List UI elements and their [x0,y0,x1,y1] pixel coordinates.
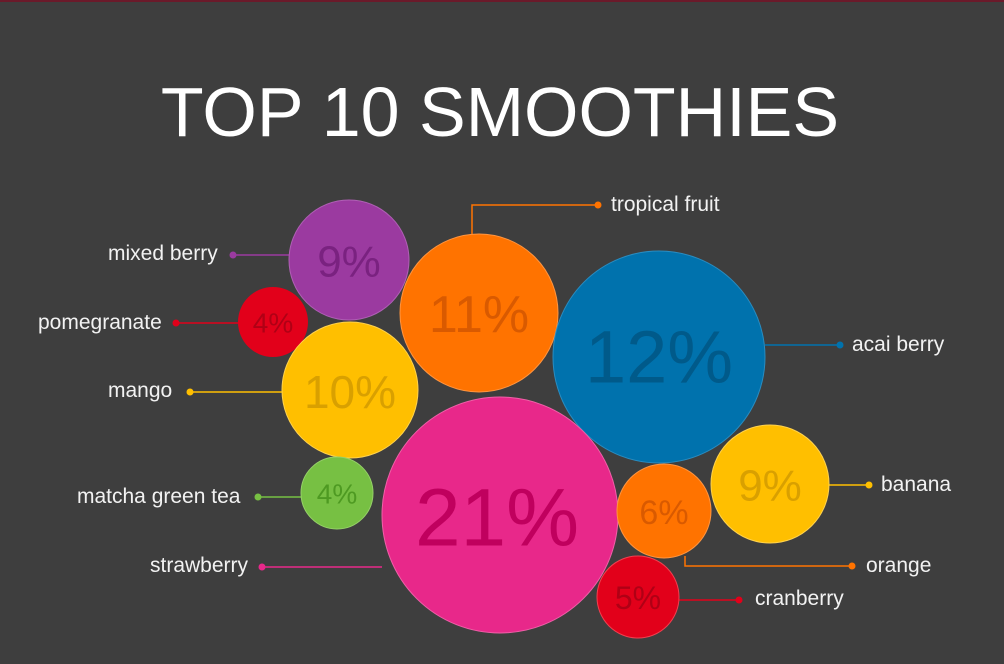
bubble: acai berry: 12% [585,316,733,398]
bubble: strawberry [150,397,618,633]
bubble: mixed berry: 9% [317,238,381,286]
bubble: cranberry [597,556,844,638]
bubble: pomegranate: 4% [253,308,293,338]
bubble: acai berry [553,251,945,463]
bubble: orange: orange [866,554,931,577]
bubble: mango: mango [108,379,172,402]
bubble: strawberry: 21% [415,472,579,564]
bubble: strawberry: strawberry [150,554,249,577]
bubble: tropical fruit [400,193,720,392]
bubble: mango [108,322,418,458]
bubble: matcha green tea: matcha green tea [77,485,241,508]
bubble: orange: 6% [639,494,689,532]
bubble: cranberry: 5% [615,580,661,616]
bubble: banana: 9% [738,462,802,510]
bubble: mixed berry [108,200,409,320]
bubble: banana: banana [881,473,951,496]
bubble: acai berry: acai berry [852,333,945,356]
bubble: matcha green tea: 4% [317,478,357,510]
bubble: tropical fruit: 11% [429,286,529,344]
bubble: cranberry: cranberry [755,587,844,610]
title: TOP 10 SMOOTHIES [161,73,839,151]
bubble: orange [617,464,931,577]
bubble: pomegranate [38,287,308,357]
bubble: pomegranate: pomegranate [38,311,162,334]
bubble: mango: 10% [304,366,396,418]
bubble: mixed berry: mixed berry [108,242,218,265]
bubble: banana [711,425,951,543]
bubble: tropical fruit: tropical fruit [611,193,720,216]
bubble: matcha green tea [77,457,373,529]
